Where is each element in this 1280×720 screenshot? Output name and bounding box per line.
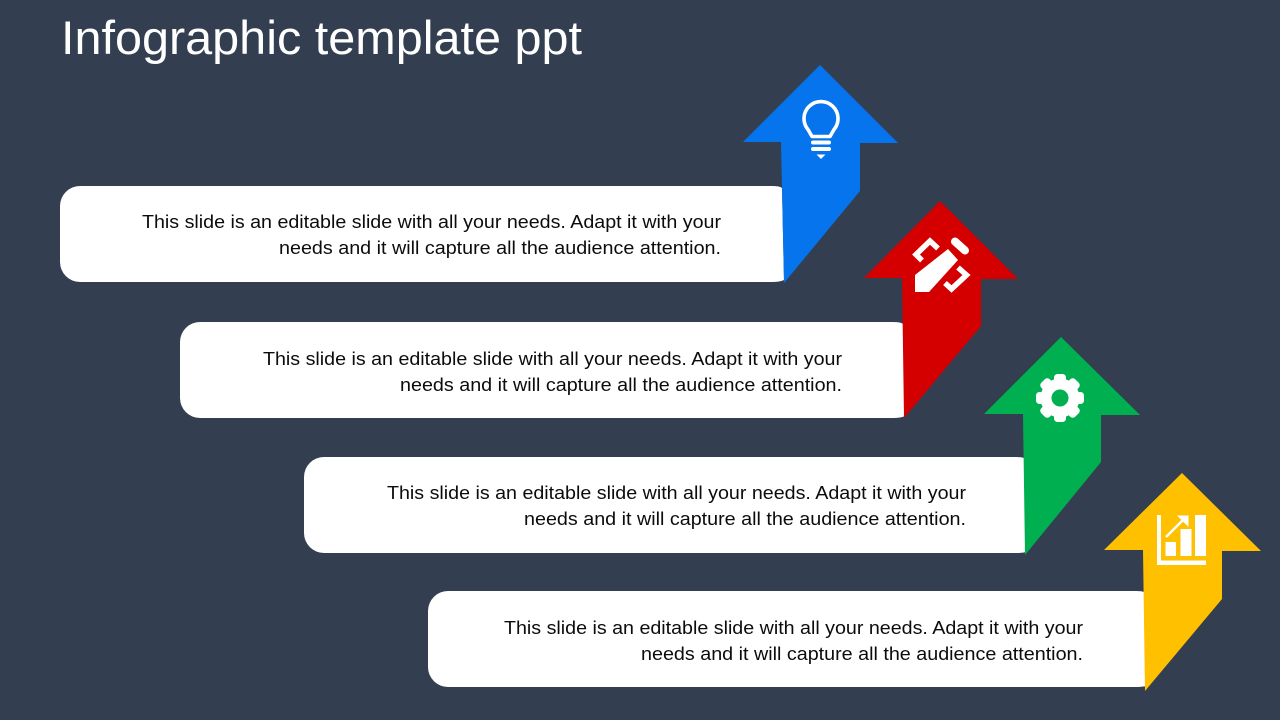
step 2: design bbox=[180, 201, 1018, 418]
arrow: yellow bbox=[1104, 473, 1261, 691]
step 4: growth bbox=[428, 473, 1261, 691]
text block: step 1: needs and it will capture all the audience attention. bbox=[279, 237, 721, 258]
icon: light bulb bbox=[804, 102, 838, 159]
text block: step 1 bbox=[142, 211, 721, 258]
panel: step 2 text card bbox=[180, 322, 905, 418]
panel: step 3 text card bbox=[304, 457, 1026, 553]
arrow: blue bbox=[743, 65, 898, 283]
arrow: green bbox=[984, 337, 1140, 555]
icon: bar chart with rising arrow bbox=[1157, 515, 1206, 565]
title: Infographic template ppt bbox=[61, 11, 582, 64]
step 3: settings bbox=[304, 337, 1140, 555]
text block: step 2: needs and it will capture all the audience attention. bbox=[400, 374, 842, 395]
text block: step 1: This slide is an editable slide with all your needs. Adapt it with your bbox=[142, 211, 721, 232]
text block: step 4: This slide is an editable slide with all your needs. Adapt it with your bbox=[504, 617, 1083, 638]
text block: step 3 bbox=[387, 482, 966, 529]
panel: step 4 text card bbox=[428, 591, 1146, 687]
step 1: idea bbox=[60, 65, 898, 283]
text block: step 3: This slide is an editable slide with all your needs. Adapt it with your bbox=[387, 482, 966, 503]
panel: step 1 text card bbox=[60, 186, 784, 282]
text block: step 2: This slide is an editable slide with all your needs. Adapt it with your bbox=[263, 348, 842, 369]
text block: step 4: needs and it will capture all the audience attention. bbox=[641, 643, 1083, 664]
icon: pencil and ruler bbox=[915, 241, 966, 292]
text block: step 4 bbox=[504, 617, 1083, 664]
icon: gear bbox=[1036, 374, 1084, 422]
text block: step 3: needs and it will capture all the audience attention. bbox=[524, 508, 966, 529]
arrow: red bbox=[864, 201, 1018, 418]
text block: step 2 bbox=[263, 348, 842, 395]
